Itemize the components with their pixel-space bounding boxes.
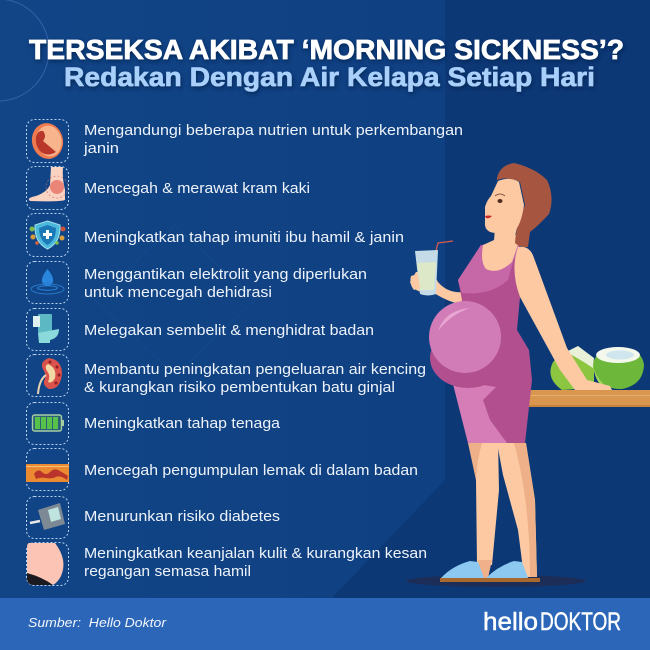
glass with straw — [415, 241, 453, 296]
item 10: belly: regangan semasa hamil — [84, 563, 251, 580]
title — [29, 34, 624, 92]
dress — [430, 243, 532, 443]
source: Sumber: Hello Doktor — [28, 615, 167, 630]
coconuts — [550, 346, 644, 390]
item 4: water drop — [26, 262, 367, 304]
title line 1: TERSEKSA AKIBAT ‘MORNING SICKNESS’? — [29, 34, 624, 65]
item 1: foetus: janin — [83, 140, 119, 157]
item 10: belly: Meningkatkan keanjalan kulit & kurangkan kesan — [84, 545, 427, 562]
item 1: foetus — [26, 120, 463, 162]
left arm holding glass — [410, 272, 465, 304]
slippers — [440, 561, 540, 582]
item 9: glucose meter — [26, 496, 280, 538]
item 2: foot — [26, 166, 310, 210]
item 3: shield: Meningkatkan tahap imuniti ibu hamil & janin — [84, 229, 404, 246]
logo: DOKTOR — [540, 608, 621, 636]
hair back — [497, 163, 552, 247]
item 2: foot: Mencegah & merawat kram kaki — [84, 180, 310, 197]
legs — [468, 440, 537, 578]
item 9: glucose meter: Menurunkan risiko diabetes — [84, 508, 280, 525]
item 5: toilet — [26, 308, 374, 350]
floor shadow — [406, 575, 586, 587]
right arm — [514, 247, 612, 390]
item 8: artery: Mencegah pengumpulan lemak di dalam badan — [84, 462, 418, 479]
item 6: kidney: & kurangkan risiko pembentukan batu ginjal — [84, 379, 395, 396]
neck and chest — [482, 228, 518, 271]
item 6: kidney: Membantu peningkatan pengeluaran air kencing — [84, 361, 426, 378]
belly — [429, 301, 501, 373]
item 3: shield — [26, 214, 404, 256]
item 7: battery — [26, 402, 281, 444]
benefit list — [26, 120, 463, 586]
head — [485, 179, 524, 237]
table — [521, 390, 650, 407]
item 8: artery — [26, 448, 418, 490]
illustration: pregnant woman with coconut water — [406, 163, 650, 587]
item 6: kidney — [26, 354, 426, 396]
hand on glass — [410, 274, 420, 290]
footer bar — [0, 598, 650, 650]
item 7: battery: Meningkatkan tahap tenaga — [84, 415, 281, 432]
item 10: belly — [26, 542, 427, 586]
title line 2: Redakan Dengan Air Kelapa Setiap Hari — [64, 62, 595, 92]
item 5: toilet: Melegakan sembelit & menghidrat badan — [84, 322, 374, 339]
item 4: water drop: Menggantikan elektrolit yang diperlukan — [84, 266, 367, 283]
logo — [483, 608, 621, 636]
logo: hello — [483, 608, 538, 636]
item 4: water drop: untuk mencegah dehidrasi — [84, 284, 272, 301]
item 1: foetus: Mengandungi beberapa nutrien untuk perkembangan — [84, 122, 463, 139]
